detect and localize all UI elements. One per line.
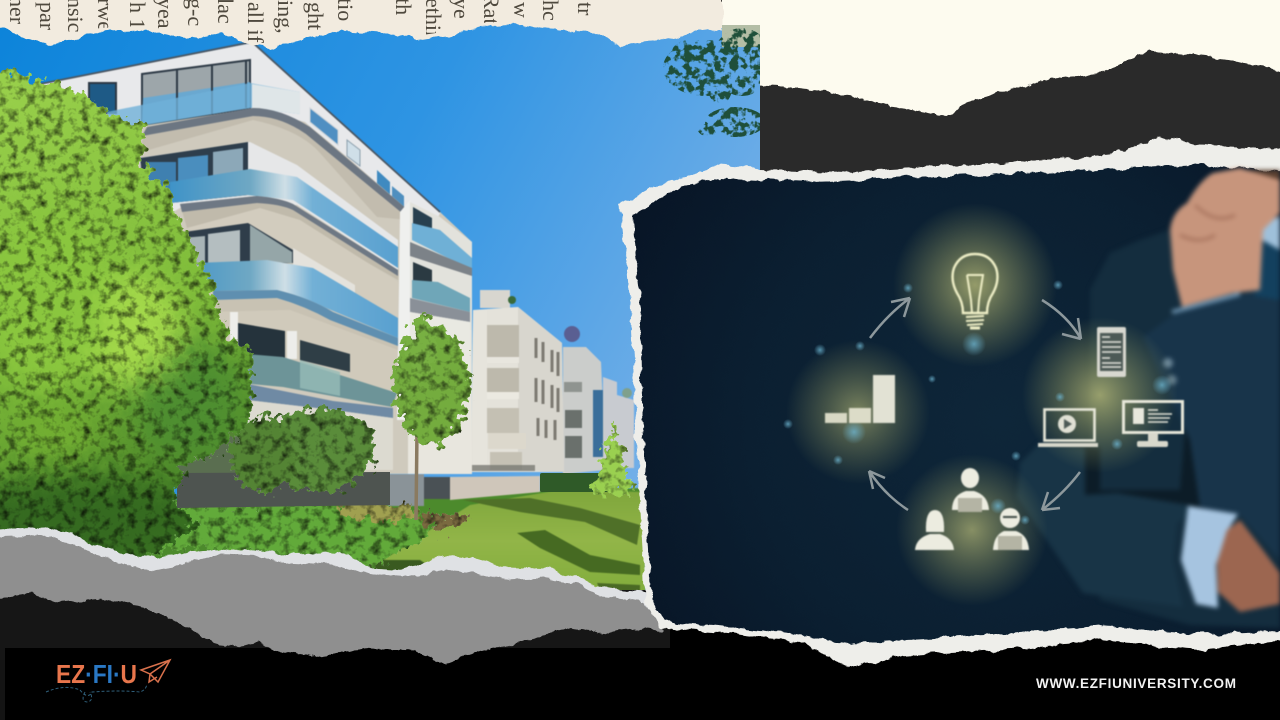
paper shape — [0, 0, 722, 48]
monitor — [1124, 402, 1182, 447]
ground backing — [130, 488, 645, 592]
cream sharp corner — [722, 0, 800, 86]
dashed flight path — [46, 684, 147, 702]
block shell — [20, 43, 472, 474]
raised sleeve — [1143, 270, 1280, 560]
icon: lightbulb — [953, 254, 997, 328]
hedge — [540, 473, 608, 492]
panel: cream paper top right — [722, 0, 1280, 190]
person top — [952, 468, 989, 512]
icon: bar chart — [825, 375, 895, 423]
particles — [783, 280, 1172, 525]
arrow: chart to bulb — [870, 298, 910, 338]
rotated print text: ing, — [273, 0, 298, 34]
suit torso — [1090, 228, 1280, 628]
dark shadow between arm and torso — [1080, 430, 1205, 510]
panel: apartment building photo — [0, 20, 772, 592]
shirt cuff top — [1260, 216, 1280, 250]
lower arm — [1017, 443, 1200, 607]
cream paper torn edge — [740, 0, 1280, 116]
icon: paper plane — [141, 660, 170, 682]
lower hand — [1217, 520, 1280, 612]
lawn — [365, 490, 645, 592]
dark torn strip — [0, 590, 670, 660]
hair — [1235, 170, 1280, 186]
third floor windows — [177, 223, 293, 265]
logo wordmark: EZ·FI·U — [56, 659, 137, 689]
fist — [1170, 168, 1280, 307]
top slab — [138, 108, 408, 220]
garden beds — [130, 503, 470, 568]
second floor wall and windows — [138, 142, 398, 270]
panel: dark tech concept photo — [620, 137, 1280, 668]
sky — [0, 20, 762, 590]
arrow: devices to people — [1042, 472, 1080, 510]
wall behind garden — [177, 472, 390, 508]
arrow: bulb to devices — [1042, 300, 1081, 339]
white torn border — [620, 137, 1280, 668]
grey sheet — [0, 535, 665, 664]
rotated print text: tr — [573, 2, 598, 16]
fourth railing — [233, 353, 397, 407]
dark torn strip — [760, 40, 1280, 190]
second slab — [180, 196, 398, 280]
main apartment block — [20, 42, 472, 476]
icon: people — [915, 468, 1029, 550]
glowing cycle diagram — [783, 203, 1182, 606]
tie — [1253, 235, 1280, 300]
top floor windows — [142, 60, 250, 125]
lower cuff — [1181, 506, 1238, 608]
rotated print text: hc — [538, 0, 563, 21]
rotated print text: h 1: — [125, 2, 150, 36]
far building — [603, 377, 634, 468]
footer base — [5, 648, 1280, 720]
rotated print text — [5, 0, 598, 44]
small tree — [394, 315, 470, 520]
top railing — [107, 83, 300, 130]
third slab — [213, 290, 398, 350]
phone — [1097, 327, 1126, 377]
logo — [46, 659, 170, 702]
rotated print text: all if — [243, 2, 268, 44]
top wall — [20, 43, 440, 232]
glows — [786, 203, 1178, 606]
rotated print text: ght — [303, 2, 328, 30]
fourth floor — [213, 310, 398, 400]
panel: black footer band — [0, 590, 1280, 720]
third railing — [197, 260, 398, 338]
rear building — [563, 347, 606, 474]
person with glasses — [993, 508, 1029, 550]
rooftop box — [480, 290, 510, 308]
panel: grey torn paper bottom left — [0, 527, 670, 664]
conifer — [592, 423, 634, 494]
second railing — [170, 169, 398, 268]
icon: devices — [1038, 327, 1182, 447]
foliage: top right tree — [663, 25, 772, 137]
background buildings — [130, 290, 645, 592]
shrubs — [231, 408, 375, 493]
rotated print text: w — [509, 2, 534, 18]
pillar — [397, 200, 410, 420]
left green tree — [0, 60, 260, 565]
laptop — [1038, 410, 1098, 447]
website url: WWW.EZFIUNIVERSITY.COM — [1036, 676, 1237, 691]
rotated print text: par — [35, 2, 60, 31]
middle building — [470, 307, 564, 472]
terrace wall — [450, 476, 540, 500]
photo background — [632, 165, 1280, 644]
fourth slab — [243, 383, 393, 418]
businessman — [1017, 168, 1280, 628]
person female — [915, 510, 954, 550]
white torn edge — [0, 527, 670, 625]
right tower — [410, 202, 472, 330]
arrow: people to chart — [869, 471, 908, 510]
panel: torn newspaper strip — [0, 0, 722, 48]
